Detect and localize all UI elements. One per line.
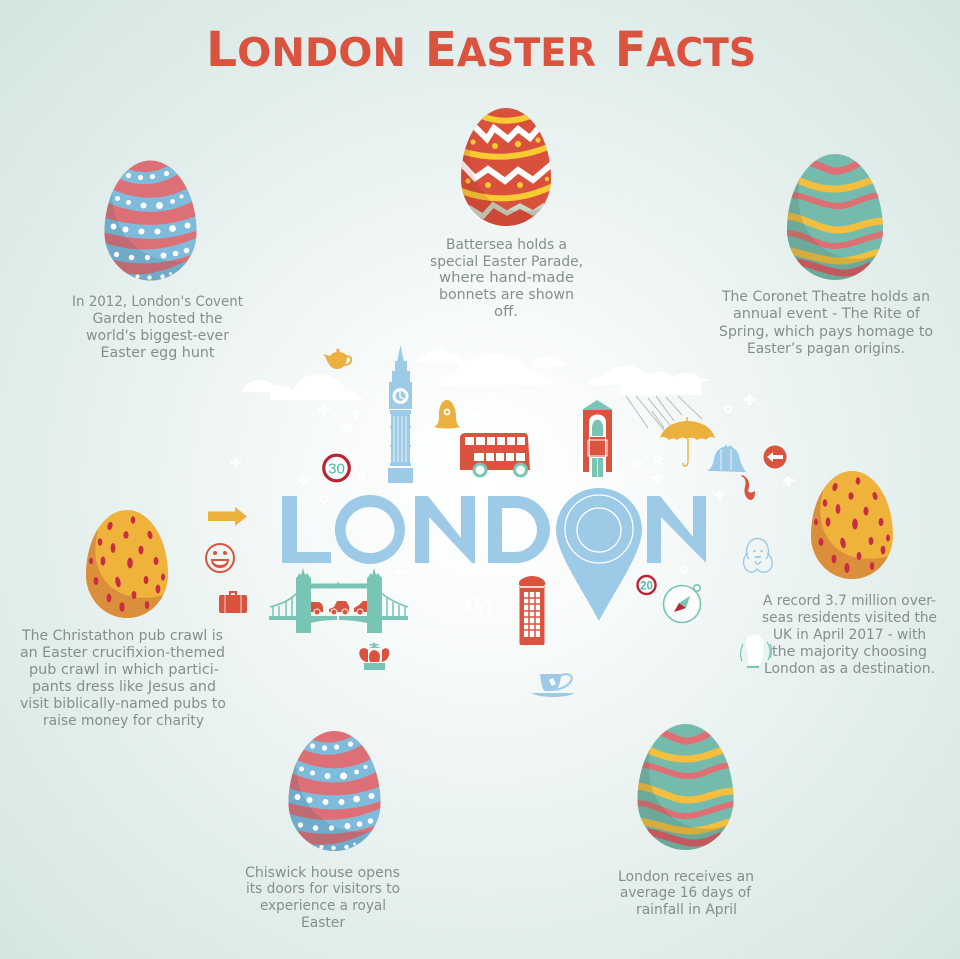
text: overseas residents fact: A record 3.7 million over- <box>763 593 936 609</box>
text: overseas residents fact: the majority choosing <box>772 644 927 660</box>
icon: umbrella <box>660 417 715 466</box>
clouds <box>242 348 712 400</box>
sparkles <box>230 395 794 578</box>
text: Coronet Theatre fact <box>719 289 933 357</box>
LONDON lettering <box>282 488 706 621</box>
icon: teapot <box>323 349 351 369</box>
icon: red phone box <box>519 576 545 645</box>
icon: smiley <box>206 544 234 572</box>
egg: green wavy, rainfall <box>636 724 736 854</box>
text: Christathon fact: an Easter crucifixion-themed <box>20 645 225 661</box>
text: Coronet Theatre fact: Spring, which pays homage to <box>719 324 933 340</box>
text: rainfall fact: rainfall in April <box>636 902 737 918</box>
text: Covent Garden fact: In 2012, London's Covent <box>72 294 243 310</box>
icon: guard in sentry box <box>582 400 613 477</box>
icon: speed sign 20: 20 <box>640 580 653 592</box>
icon: music notes <box>465 596 491 615</box>
egg: green wavy, Coronet Theatre <box>785 154 885 284</box>
text: Battersea fact: bonnets are shown <box>439 287 574 303</box>
text: Christathon fact <box>20 628 226 729</box>
text: Battersea fact: where hand-made <box>439 270 574 286</box>
icon: pipe <box>741 475 755 500</box>
egg: orange spotted, overseas residents <box>809 471 893 583</box>
map pin O <box>556 488 642 621</box>
text: Battersea fact: Battersea holds a <box>446 237 567 253</box>
icon: compass <box>664 585 700 622</box>
text: overseas residents fact: UK in April 2017 - with <box>773 627 926 643</box>
text: Christathon fact: visit biblically-named pubs to <box>20 696 226 712</box>
egg: blue and pink, Chiswick house <box>286 731 384 856</box>
text: Coronet Theatre fact: annual event - The Rite of <box>733 306 921 322</box>
text: Christathon fact: pub crawl in which partici- <box>29 662 219 678</box>
text: Chiswick house fact: its doors for visitors to <box>246 881 400 897</box>
icon: speed sign 30: 30 <box>328 460 345 478</box>
icon: suitcase <box>219 591 247 613</box>
text: Chiswick house fact: Chiswick house opens <box>245 865 400 881</box>
text: Battersea fact <box>430 237 583 320</box>
text: Covent Garden fact: Easter egg hunt <box>100 345 215 361</box>
text: Covent Garden fact <box>72 294 243 361</box>
text: Battersea fact: special Easter Parade, <box>430 254 583 270</box>
text: Covent Garden fact: Garden hosted the <box>92 311 223 327</box>
text: Covent Garden fact: world's biggest-ever <box>86 328 229 344</box>
text: overseas residents fact: London as a destination. <box>764 661 935 677</box>
text: Coronet Theatre fact: The Coronet Theatre holds an <box>721 289 930 305</box>
egg: orange spotted, Christathon <box>84 510 168 622</box>
icon: right arrow <box>208 507 247 526</box>
title: FACTS <box>615 22 756 78</box>
text: Coronet Theatre fact: Easter’s pagan origins. <box>747 341 905 357</box>
egg: red zigzag, Battersea <box>459 108 553 230</box>
icon: double decker bus <box>460 433 530 476</box>
text: Chiswick house fact: experience a royal <box>260 898 386 914</box>
title: LONDON <box>206 22 406 78</box>
icon: speed sign 30 <box>324 455 349 481</box>
icon: cars on bridge <box>311 601 367 615</box>
text: rainfall fact: average 16 days of <box>620 885 752 901</box>
text: Chiswick house fact <box>245 865 400 931</box>
icon: Big Ben <box>388 345 413 483</box>
title: EASTER <box>425 22 596 78</box>
text: overseas residents fact <box>762 593 937 677</box>
icon: waving hand <box>741 634 772 668</box>
rain lines <box>626 396 702 430</box>
icon: police helmet <box>434 400 460 428</box>
text: Christathon fact: pants dress like Jesus and <box>32 679 216 695</box>
icon: teacup and saucer <box>531 674 575 697</box>
icon: Shakespeare <box>744 538 772 572</box>
text: Chiswick house fact: Easter <box>301 915 345 931</box>
icon: left arrow circle <box>764 446 786 468</box>
text: overseas residents fact: seas residents visited the <box>762 610 937 626</box>
icon: crown <box>359 642 389 670</box>
text: rainfall fact: London receives an <box>618 869 754 885</box>
title <box>206 22 756 78</box>
text: Christathon fact: raise money for charity <box>43 713 204 729</box>
text: Battersea fact: off. <box>494 304 518 320</box>
icon: deerstalker hat <box>707 445 746 472</box>
text: rainfall fact <box>618 869 754 918</box>
egg: blue and pink, Covent Garden <box>102 160 200 286</box>
icon: Tower Bridge <box>269 568 408 633</box>
text: Christathon fact: The Christathon pub crawl is <box>21 628 223 644</box>
icon: speed sign 20 <box>638 576 656 594</box>
